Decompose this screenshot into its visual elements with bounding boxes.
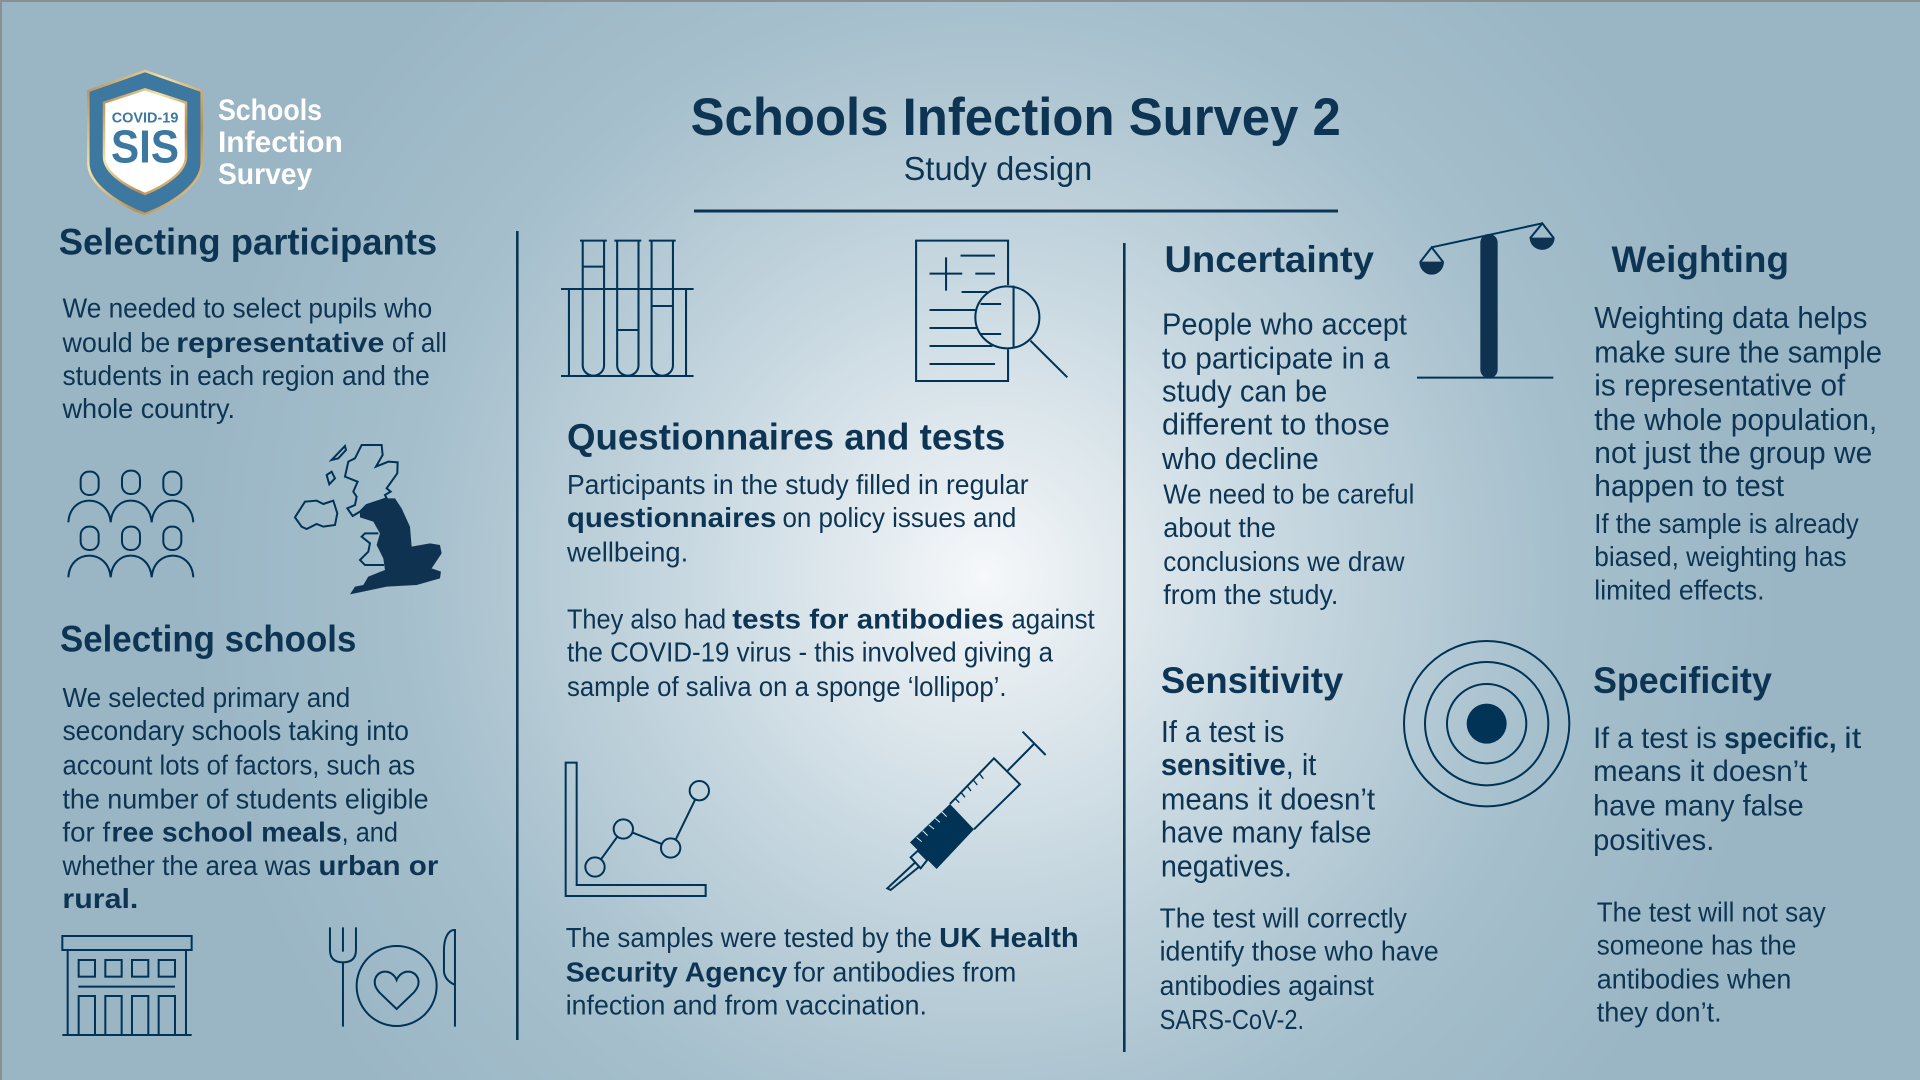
icon: pupils [68,471,193,577]
text: selecting schools: for f [62,817,111,848]
text: uncertainty: conclusions we draw [1163,546,1405,577]
text: questionnaires: wellbeing. [566,536,688,567]
text: selecting participants: students in each region and the [62,360,430,391]
text: UK Health Security Agency: for antibodies from [793,956,1016,987]
title rule [694,210,1338,212]
text: selecting schools: urban or [318,850,439,881]
icon: test tubes [561,241,694,376]
text: uncertainty: about the [1163,512,1276,543]
text: sensitivity: The test will correctly [1160,902,1407,933]
text: selecting schools: , and [342,817,398,848]
text: specificity: The test will not say [1597,896,1826,927]
text: selecting participants: whole country. [61,393,235,424]
heading: selecting schools: Selecting schools [60,618,356,659]
text: selecting schools [62,682,439,914]
text: specificity: they don’t. [1597,997,1722,1028]
text: UK Health Security Agency: Security Agency [566,956,788,987]
text: weighting [1594,301,1882,605]
text: antibody tests [567,604,1095,702]
text: specificity [1593,722,1861,1028]
text: selecting participants: of all [392,327,447,358]
text: weighting: happen to test [1594,469,1785,503]
text: sensitivity: If a test is [1161,715,1285,749]
text: selecting participants: representative [176,327,384,358]
text: selecting schools: secondary schools taking into [62,715,409,746]
text: weighting: biased, weighting has [1594,541,1847,572]
column divider right [1123,243,1126,1052]
text: antibody tests: the COVID-19 virus - this involved giving a [567,637,1054,668]
heading: sensitivity: Sensitivity [1161,660,1344,701]
text: uncertainty: who decline [1161,442,1319,476]
text: selecting participants: would be [61,327,170,358]
text: sensitivity [1160,715,1439,1035]
text: questionnaires [566,469,1029,567]
text: sensitivity: means it doesn’t [1161,782,1376,816]
icon: free school meal plate [330,927,455,1027]
icon: syringe [887,732,1046,890]
text: questionnaires: on policy issues and [782,502,1016,533]
logo: shield [88,71,202,214]
text: sensitivity: , it [1286,748,1317,782]
text: uncertainty: different to those [1162,408,1390,442]
text: UK Health Security Agency: UK Health [939,922,1079,953]
text: uncertainty [1161,307,1414,610]
text: UK Health Security Agency: infection and from vaccination. [566,989,927,1020]
text: antibody tests: tests for antibodies [732,604,1004,635]
icon: line chart [566,763,709,896]
text: UK Health Security Agency: The samples were tested by the [566,922,932,953]
text: weighting: not just the group we [1594,436,1872,470]
logo: wordmark: Schools [218,94,322,127]
text: selecting participants [61,293,447,424]
heading: uncertainty: Uncertainty [1164,239,1374,280]
column divider left [516,231,519,1040]
heading: specificity: Specificity [1593,660,1772,701]
text: uncertainty: study can be [1162,375,1327,409]
text: uncertainty: from the study. [1163,579,1338,610]
text: selecting schools: account lots of factors, such as [62,749,415,780]
text: weighting: If the sample is already [1594,508,1859,539]
logo: shield: SIS [111,121,179,173]
icon: UK map [295,445,442,594]
text: weighting: Weighting data helps [1594,301,1867,335]
text: antibody tests: They also had [567,604,726,635]
text: sensitivity: SARS-CoV-2. [1160,1004,1304,1035]
text: selecting schools: the number of students eligible [62,784,429,815]
text: questionnaires: questionnaires [567,502,776,533]
text: selecting schools: ree school meals [111,817,342,848]
icon: target [1404,641,1569,806]
text: antibody tests: against [1011,604,1095,635]
heading: weighting: Weighting [1611,239,1789,280]
logo: wordmark: Survey [218,158,313,191]
text: questionnaires: Participants in the study filled in regular [567,469,1029,500]
text: specificity: it [1844,722,1861,755]
text: UK Health Security Agency [566,922,1079,1020]
text: weighting: is representative of [1594,369,1846,403]
text: sensitivity: identify those who have [1160,935,1439,966]
text: selecting schools: whether the area was [62,850,311,881]
logo: shield: COVID-19 [112,111,178,127]
text: specificity: positives. [1593,824,1714,857]
text: selecting participants: We needed to select pupils who [62,293,432,324]
text: sensitivity: sensitive [1161,748,1286,782]
subtitle: Study design [904,151,1092,188]
icon: weighing scales [1417,223,1555,378]
text: uncertainty: We need to be careful [1163,479,1414,510]
text: specificity: specific, [1724,722,1837,755]
text: weighting: limited effects. [1594,574,1765,605]
text: specificity: If a test is [1593,722,1717,755]
text: antibody tests: sample of saliva on a sponge ‘lollipop’. [567,671,1007,702]
text: selecting schools: rural. [62,883,138,914]
text: specificity: have many false [1593,790,1804,823]
text: specificity: someone has the [1597,929,1796,960]
text: selecting schools: We selected primary and [62,682,350,713]
text: uncertainty: to participate in a [1162,342,1391,376]
icon: document and magnifier [916,241,1067,381]
text: sensitivity: antibodies against [1160,970,1374,1001]
icon: school building [62,936,192,1035]
text: sensitivity: have many false [1161,815,1371,849]
logo: wordmark: Infection [218,126,343,159]
text: weighting: the whole population, [1594,403,1877,437]
text: specificity: means it doesn’t [1593,755,1807,788]
text: sensitivity: negatives. [1161,850,1292,884]
heading: selecting participants: Selecting participants [59,222,437,263]
heading: questionnaires and tests: Questionnaires and tests [567,416,1005,457]
text: weighting: make sure the sample [1594,335,1882,369]
title: Schools Infection Survey 2 [691,88,1341,147]
text: specificity: antibodies when [1597,964,1791,995]
logo: wordmark [218,94,343,191]
text: uncertainty: People who accept [1162,307,1407,341]
